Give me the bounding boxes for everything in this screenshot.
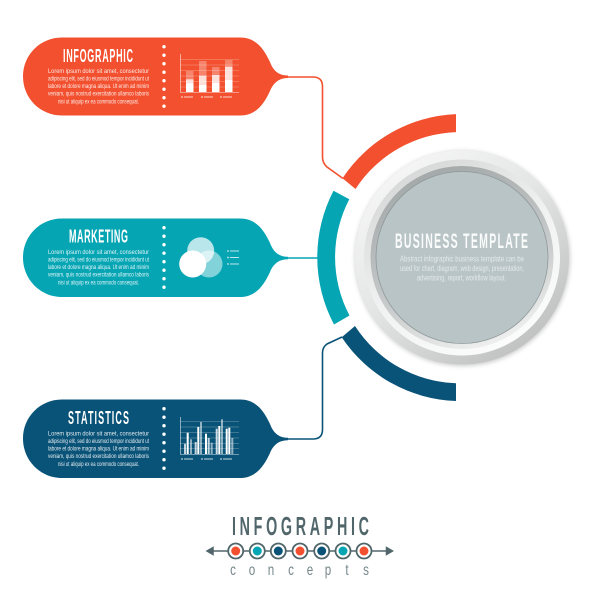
- body text: Lorem ipsum dolor sit amet, consectetur: [48, 249, 149, 256]
- body text: veniam, quis nostrud exercitation ullamco laboris: [48, 453, 149, 460]
- center body text: used for chart, diagram, web design, presentation,: [400, 264, 524, 273]
- body text: labore et dolore magna aliqua. Ut enim ad minim: [48, 264, 149, 271]
- body text: Lorem ipsum dolor sit amet, consectetur: [48, 68, 149, 75]
- center body text: [400, 254, 524, 282]
- body text: adipiscing elit, sed do eiusmod tempor incididunt ut: [48, 438, 149, 445]
- heading: MARKETING: [69, 227, 128, 248]
- dotted divider: [162, 407, 166, 470]
- panel: marketing: [23, 218, 319, 297]
- center heading: BUSINESS TEMPLATE: [395, 229, 528, 253]
- arc: teal segment: [317, 191, 350, 324]
- connector: red line: [285, 77, 343, 178]
- body text: adipiscing elit, sed do eiusmod tempor incididunt ut: [48, 76, 149, 82]
- connector: teal line: [285, 257, 319, 259]
- body text: adipiscing elit, sed do eiusmod tempor incididunt ut: [48, 256, 149, 264]
- dotted divider: [162, 45, 166, 108]
- body text: nisi ut aliquip ex ea commodo consequat.: [58, 280, 139, 286]
- body text: labore et dolore magna aliqua. Ut enim ad minim: [48, 83, 149, 90]
- footer logo: [207, 513, 392, 578]
- timeline dots: [228, 544, 372, 558]
- footer title: INFOGRAPHIC: [232, 513, 369, 541]
- body text: veniam, quis nostrud exercitation ullamco laboris: [48, 90, 149, 98]
- heading: INFOGRAPHIC: [63, 47, 133, 67]
- stacked bar chart: [180, 54, 239, 98]
- center body text: Abstract infographic business template can be: [400, 254, 524, 264]
- timeline dot colors: [231, 546, 368, 556]
- body text: Lorem ipsum dolor sit amet, consectetur: [48, 430, 149, 437]
- body text: nisi ut aliquip ex ea commodo consequat.: [58, 461, 139, 468]
- center body text: advertising, report, workflow layout.: [417, 274, 506, 282]
- arc: red segment: [342, 114, 456, 189]
- body text: [48, 249, 149, 286]
- timeline arrow: [207, 548, 392, 554]
- heading: STATISTICS: [68, 409, 129, 429]
- body text: labore et dolore magna aliqua. Ut enim ad minim: [48, 446, 149, 452]
- red pill: [23, 38, 288, 116]
- body text: nisi ut aliquip ex ea commodo consequat.: [58, 98, 139, 106]
- teal pill: [23, 218, 288, 297]
- blue pill: [23, 400, 288, 478]
- arc: blue segment: [342, 326, 456, 401]
- body text: [48, 430, 149, 468]
- footer subtitle: concepts: [230, 561, 369, 578]
- grouped bar chart: [180, 417, 239, 460]
- venn diagram: [179, 237, 239, 278]
- central silver circle: [355, 150, 570, 366]
- body text: veniam, quis nostrud exercitation ullamco laboris: [48, 272, 149, 278]
- panel: statistics: [23, 337, 342, 478]
- connector: blue line: [285, 337, 342, 439]
- dotted divider: [162, 226, 166, 289]
- body text: [48, 68, 149, 106]
- panel: infographic: [23, 38, 343, 178]
